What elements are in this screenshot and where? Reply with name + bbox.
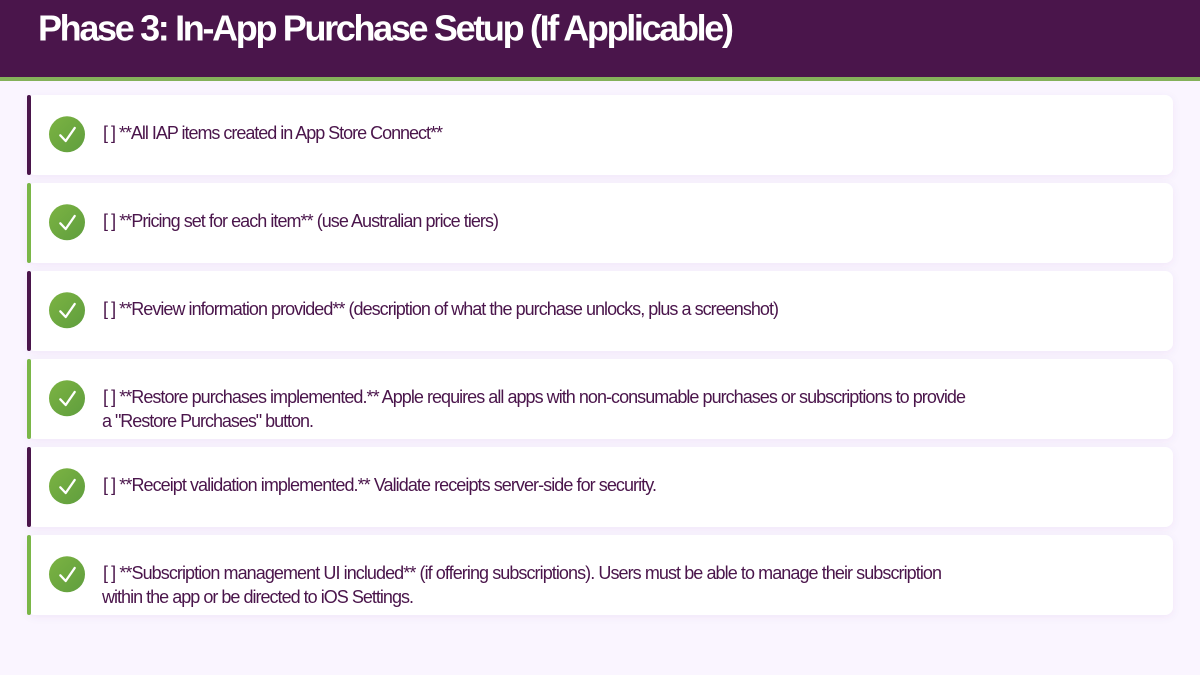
checklist item 2 bbox=[27, 183, 1173, 263]
checklist item 3: [ ] **Review information provided** (description of what the purchase unlocks, plus a screenshot) bbox=[103, 299, 779, 319]
checklist item 6: [ ] **Subscription management UI included** (if offering subscriptions). Users must be able to manage their subscription bbox=[103, 563, 942, 583]
checklist item 1: [ ] **All IAP items created in App Store Connect** bbox=[103, 123, 443, 143]
checklist item 2: [ ] **Pricing set for each item** (use Australian price tiers) bbox=[103, 211, 499, 231]
header band bbox=[0, 0, 1200, 81]
checklist item 3 bbox=[27, 271, 1173, 351]
checklist item 6: within the app or be directed to iOS Settings. bbox=[101, 587, 414, 607]
checklist item 4: a "Restore Purchases" button. bbox=[102, 411, 314, 431]
checklist item 5: [ ] **Receipt validation implemented.** Validate receipts server-side for security. bbox=[103, 475, 657, 495]
checklist item 4: [ ] **Restore purchases implemented.** Apple requires all apps with non-consumable purchases or subscriptions to provide bbox=[103, 387, 966, 407]
checklist item 5 bbox=[27, 447, 1173, 527]
checklist item 1 bbox=[27, 95, 1173, 175]
checklist item 4 bbox=[27, 359, 1173, 439]
title: Phase 3: In-App Purchase Setup (If Applicable) bbox=[38, 8, 734, 48]
checklist item 6 bbox=[27, 535, 1173, 615]
